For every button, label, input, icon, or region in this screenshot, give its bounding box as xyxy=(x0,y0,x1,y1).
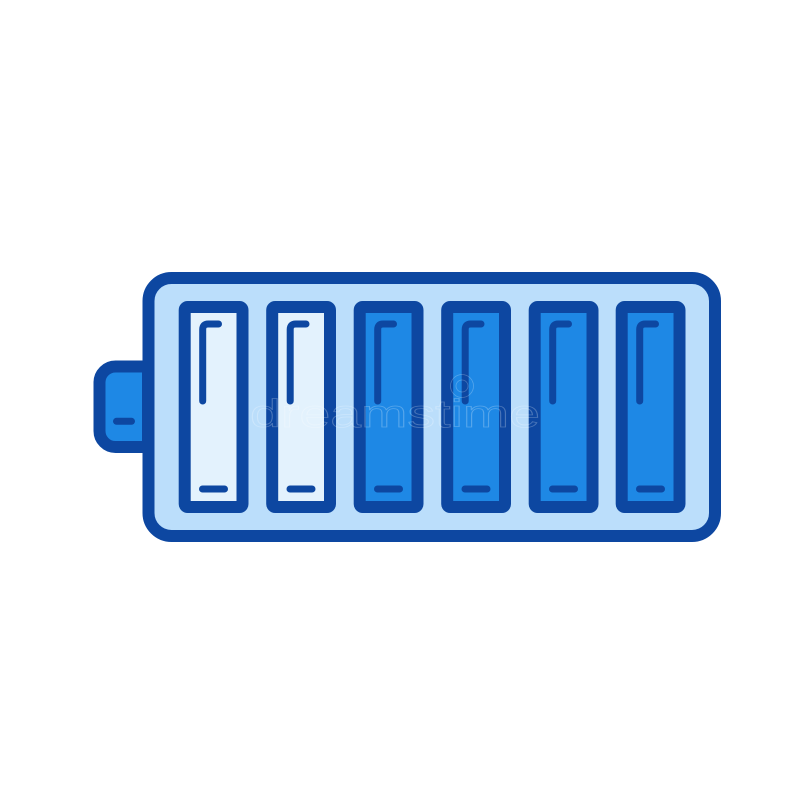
icon: battery terminal xyxy=(100,366,148,447)
watermark text: dreamstime xyxy=(250,393,540,436)
cell 3: charged xyxy=(360,307,418,507)
cell 2: empty xyxy=(272,307,330,507)
icon: watermark spiral xyxy=(450,374,474,398)
battery body xyxy=(148,278,715,536)
cell 5: charged xyxy=(535,307,592,507)
battery xyxy=(100,278,715,536)
watermark xyxy=(250,374,540,436)
cell 4: charged xyxy=(447,307,505,507)
cell 1: empty xyxy=(185,307,242,507)
cell 6: charged xyxy=(622,307,680,507)
